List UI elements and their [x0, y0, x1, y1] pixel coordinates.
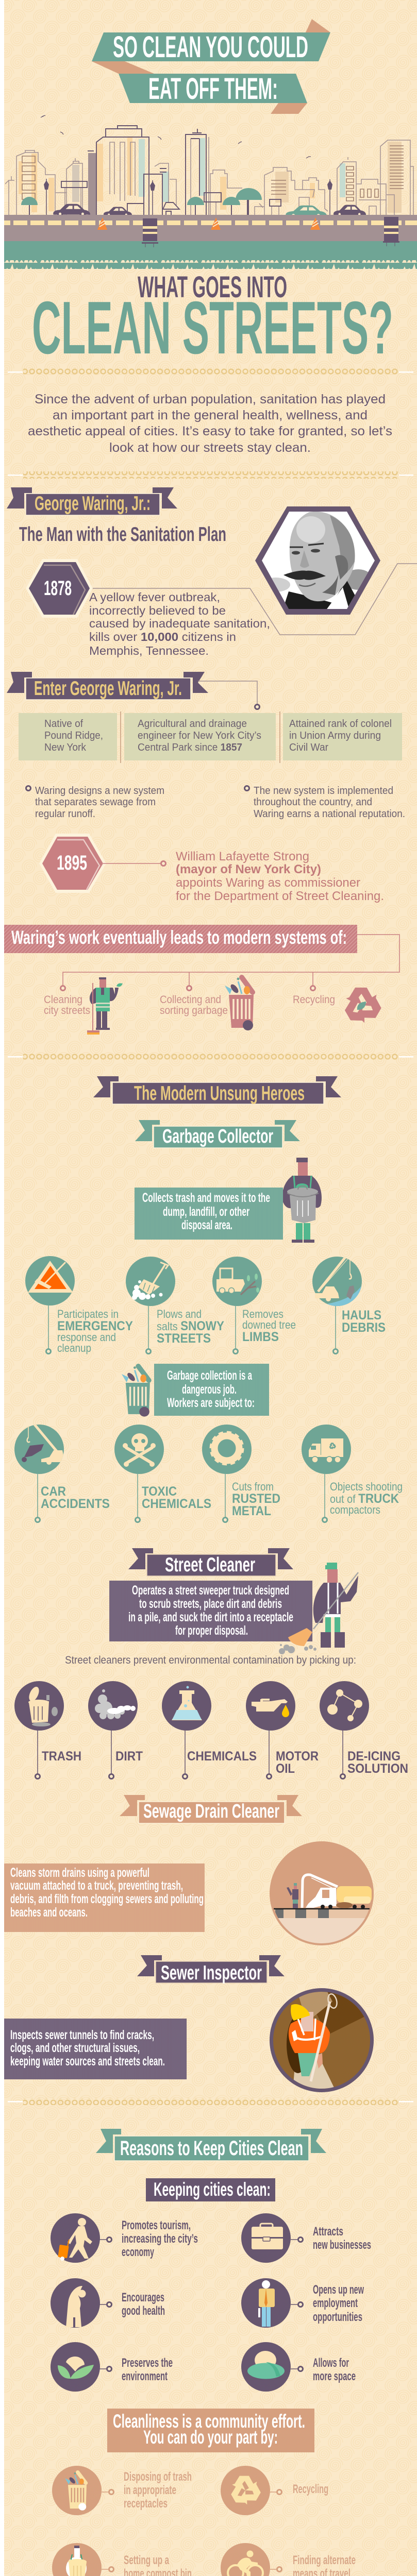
pickup: trash: TRASH: [42, 1749, 81, 1764]
duty: tree limbs: Removes: [242, 1308, 283, 1320]
year badge 1878: [26, 559, 93, 618]
text box: street cleaner role: Operates a street sweeper truck designed: [132, 1583, 289, 1598]
bullet points: [26, 785, 405, 820]
reason: employment: employment: [313, 2296, 358, 2310]
ribbon heading: Street Cleaner: [128, 1548, 293, 1576]
duty: snowy streets: STREETS: [157, 1331, 211, 1346]
hazard: toxic chemicals: TOXIC: [142, 1484, 177, 1499]
reason: new businesses: new businesses: [313, 2238, 371, 2252]
reason: employment: Opens up new: [313, 2283, 364, 2297]
reason: tourism: economy: [122, 2245, 154, 2259]
text box: garbage collector role: disposal area.: [181, 1218, 232, 1232]
duty: emergency response: Participates in: [57, 1308, 119, 1320]
hazard: toxic chemicals: [114, 1425, 211, 1522]
bar ladders: [22, 146, 404, 201]
city skyline illustration: [5, 115, 413, 218]
duty: emergency response: [25, 1256, 133, 1354]
1895 appointment text: William Lafayette Strong: [176, 850, 309, 863]
figure: garbage collector with can: [282, 1158, 322, 1243]
pickup: trash: [14, 1681, 81, 1778]
duty: tree limbs: LIMBS: [242, 1330, 279, 1344]
ribbon heading: George Waring, Jr.: [7, 487, 177, 515]
pickup: motor oil: OIL: [276, 1761, 295, 1776]
reason: good health: Encourages: [122, 2291, 164, 2304]
hazard: car accidents: [14, 1425, 110, 1522]
fact boxes: [19, 711, 402, 763]
action: home compost bin: Setting up a: [124, 2553, 169, 2567]
cars: [53, 204, 366, 218]
icon: teal bin: [122, 1366, 150, 1417]
bullet points: regular runoff.: [35, 808, 95, 820]
subheading box: keeping cities clean: [146, 2178, 275, 2201]
ribbon heading: Sewage Drain Cleaner: [120, 1795, 302, 1823]
hazard: rusted metal: Cuts from: [232, 1480, 274, 1493]
bullet points: The new system is implemented: [254, 785, 393, 796]
action: alternate travel: [221, 2543, 356, 2576]
action: disposing of trash: receptacles: [124, 2497, 168, 2511]
yellow fever text: kills over 10,000 citizens in: [89, 630, 236, 643]
1895 appointment text: [176, 850, 384, 903]
modern system labels: Collecting and: [160, 994, 221, 1006]
duty: hauls debris: HAULS: [342, 1308, 381, 1323]
thin building outlines: [5, 137, 413, 215]
text box: sewage drain cleaner role: beaches and oceans.: [10, 1905, 88, 1920]
reason: tourism: increasing the city’s: [122, 2232, 198, 2246]
text box: street cleaner role: for proper disposal.: [175, 1623, 248, 1638]
bullet points: that separates sewage from: [35, 796, 156, 808]
modern system labels: sorting garbage: [160, 1005, 228, 1016]
icon: recycling arrows: [340, 988, 385, 1026]
bullet points: throughout the country, and: [254, 796, 372, 808]
bullet points: Waring designs a new system: [35, 785, 164, 796]
yellow fever text: caused by inadequate sanitation,: [89, 617, 270, 630]
ribbon heading: Enter George Waring, Jr.: [7, 672, 208, 700]
ribbon heading: The Modern Unsung Heroes: [93, 1076, 341, 1105]
ribbon heading: Enter George Waring, Jr.: Enter George Waring, Jr.: [34, 677, 182, 700]
duty: snowy streets: Plows and: [157, 1308, 202, 1320]
icon: street worker with broom: [87, 977, 123, 1035]
ribbon heading: Reasons to Keep Cities Clean: Reasons to Keep Cities Clean: [120, 2137, 303, 2160]
bullet points: Waring earns a national reputation.: [254, 808, 405, 820]
ribbon heading: Sewer Inspector: [137, 1955, 285, 1984]
divider: [8, 2098, 413, 2105]
ribbon heading: Garbage Collector: Garbage Collector: [162, 1126, 273, 1147]
pickup: motor oil: [246, 1681, 319, 1778]
pickup: dirt: DIRT: [115, 1749, 143, 1764]
divider: [8, 471, 413, 479]
pickup: de-icing solution: DE-ICING: [347, 1749, 401, 1764]
banner: modern systems: [4, 925, 357, 953]
fact boxes: engineer for New York City’s: [138, 730, 261, 741]
pickup: motor oil: MOTOR: [276, 1749, 319, 1764]
reason: tourism: Promotes tourism,: [122, 2218, 191, 2232]
year badge 1878: 1878: [44, 577, 72, 600]
reason: new businesses: [241, 2213, 371, 2263]
ribbon heading: Garbage Collector: [135, 1120, 300, 1148]
modern system labels: city streets: [44, 1005, 90, 1016]
ribbon heading: Sewage Drain Cleaner: Sewage Drain Cleaner: [143, 1801, 279, 1822]
fact boxes: Attained rank of colonel: [289, 718, 392, 730]
action: home compost bin: [52, 2543, 192, 2576]
reason: environment: environment: [122, 2369, 168, 2383]
text box: sewage drain cleaner role: debris, and filth from clogging sewers and polluting: [10, 1892, 204, 1906]
text box: sewer inspector role: Inspects sewer tunnels to find cracks,: [10, 2028, 154, 2042]
traffic cones: [97, 217, 320, 230]
text box: garbage collector role: dump, landfill, or other: [163, 1205, 249, 1219]
text box: garbage collector role: Collects trash and moves it to the: [142, 1191, 270, 1205]
duty: hauls debris: DEBRIS: [342, 1320, 386, 1335]
yellow fever text: [89, 590, 270, 657]
action: alternate travel: Finding alternate: [293, 2553, 356, 2567]
fact boxes: Native of: [44, 718, 83, 730]
reason: environment: [51, 2342, 173, 2392]
timeline connector 1878: [90, 564, 417, 635]
hazard: rusted metal: METAL: [232, 1504, 271, 1518]
1895 appointment text: appoints Waring as commissioner: [176, 876, 360, 890]
fact boxes: Central Park since 1857: [138, 742, 242, 753]
text box: street cleaner role: [109, 1581, 312, 1641]
intro paragraph: [28, 392, 392, 455]
action: disposing of trash: in appropriate: [124, 2483, 176, 2497]
text box: street cleaner role: in a pile, and suck the dirt into a receptacle: [128, 1610, 293, 1624]
fact boxes: in Union Army during: [289, 730, 381, 741]
illustration: sewer inspector in tunnel: [270, 1988, 374, 2093]
connector to fact boxes: [198, 681, 260, 709]
connector tree to modern systems: [61, 935, 399, 990]
duty: tree limbs: downed tree: [242, 1318, 296, 1331]
reason: tourism: [51, 2213, 198, 2263]
reason: new businesses: Attracts: [313, 2225, 343, 2239]
text box: dangerous job: dangerous job.: [182, 1382, 237, 1397]
ribbon heading: George Waring, Jr.: George Waring, Jr.:: [35, 493, 151, 515]
subheading: The Man with the Sanitation Plan: [19, 523, 226, 546]
text box: street cleaner role: to scrub streets, place dirt and debris: [139, 1597, 282, 1611]
street trees: [21, 188, 262, 215]
pickup: chemicals: [162, 1681, 257, 1778]
year badge 1895: 1895: [57, 852, 87, 874]
action: recycling: Recycling: [293, 2482, 328, 2496]
pickup: chemicals: CHEMICALS: [187, 1749, 257, 1764]
text box: sewage drain cleaner role: [4, 1863, 205, 1932]
intro paragraph: aesthetic appeal of cities. It’s easy to take for granted, so let’s: [28, 424, 392, 438]
year badge 1895: [39, 834, 166, 893]
hazard: truck compactors: compactors: [330, 1503, 380, 1516]
action: recycling: [221, 2466, 328, 2515]
text box: garbage collector role: [135, 1188, 283, 1240]
pickup: de-icing solution: [320, 1681, 408, 1778]
fact boxes: Pound Ridge,: [44, 730, 103, 741]
duty: hauls debris: [312, 1257, 386, 1354]
yellow fever text: Memphis, Tennessee.: [89, 644, 209, 657]
intro paragraph: Since the advent of urban population, sanitation has played: [35, 392, 386, 406]
pickup: dirt: [88, 1681, 143, 1778]
modern system labels: Cleaning: [44, 994, 82, 1006]
bollards: [143, 217, 398, 243]
hazard: car accidents: ACCIDENTS: [41, 1497, 110, 1511]
street lamps: [44, 179, 332, 215]
ribbon heading: Sewer Inspector: Sewer Inspector: [161, 1962, 262, 1984]
action: disposing of trash: Disposing of trash: [124, 2470, 192, 2484]
modern system labels: Recycling: [293, 994, 335, 1006]
duty: emergency response: cleanup: [57, 1342, 91, 1354]
reason: good health: good health: [122, 2304, 165, 2318]
figure: street cleaner with broom: [279, 1563, 358, 1654]
ribbon heading: The Modern Unsung Heroes: The Modern Unsung Heroes: [134, 1082, 305, 1105]
reason: more space: [241, 2342, 356, 2392]
hazard: rusted metal: [202, 1425, 280, 1522]
hazard: rusted metal: RUSTED: [232, 1492, 280, 1506]
grass strip: [4, 241, 417, 269]
illustration: drain vacuum truck: [270, 1841, 374, 1949]
text box: sewage drain cleaner role: Cleans storm drains using a powerful: [10, 1866, 149, 1880]
birds: [41, 115, 311, 158]
reason: employment: opportunities: [313, 2310, 362, 2324]
road with lane markings, cones and bollards: [4, 215, 417, 243]
drain worker: [287, 1883, 298, 1908]
duty: snowy streets: [126, 1257, 224, 1354]
title: WHAT GOES INTO: [138, 270, 287, 304]
ribbon heading: Street Cleaner: Street Cleaner: [165, 1554, 255, 1576]
text box: dangerous job: Workers are subject to:: [167, 1396, 255, 1410]
duty: emergency response: response and: [57, 1331, 116, 1344]
1895 appointment text: for the Department of Street Cleaning.: [176, 889, 384, 903]
pickup: de-icing solution: SOLUTION: [347, 1761, 408, 1776]
subheading box: keeping cities clean: Keeping cities clean:: [154, 2179, 271, 2200]
icon: garbage bin: [225, 977, 254, 1030]
divider: [8, 368, 413, 376]
reason: more space: more space: [313, 2369, 356, 2383]
duty: snowy streets: salts SNOWY: [157, 1319, 224, 1333]
fact boxes: Agricultural and drainage: [138, 718, 247, 730]
reason: employment: [241, 2278, 364, 2328]
text box: sewer inspector role: keeping water sources and streets clean.: [10, 2054, 165, 2069]
statement: street cleaners prevent contamination: Street cleaners prevent environmental contamination by picking up:: [65, 1654, 356, 1666]
callout: community effort: You can do your part by:: [143, 2427, 278, 2448]
bold building outlines: [61, 126, 281, 215]
reason: environment: Preserves the: [122, 2356, 173, 2370]
tinted building strips: [19, 138, 315, 212]
callout: community effort: Cleanliness is a community effort.: [113, 2411, 305, 2432]
fact boxes: Civil War: [289, 742, 328, 753]
1895 appointment text: (mayor of New York City): [176, 862, 321, 876]
hazard: truck compactors: Objects shooting: [330, 1480, 403, 1493]
intro paragraph: an important part in the general health, wellness, and: [53, 408, 368, 422]
duty: tree limbs: [212, 1257, 296, 1354]
intro paragraph: look at how our streets stay clean.: [109, 440, 311, 455]
fact boxes: New York: [44, 742, 87, 753]
divider: [8, 1053, 413, 1060]
text box: dangerous job: Garbage collection is a: [167, 1368, 253, 1383]
text box: sewer inspector role: clogs, and other structural issues,: [10, 2041, 140, 2055]
hazard: truck compactors: [302, 1425, 403, 1522]
modern system labels: [44, 994, 335, 1016]
ribbon heading: Reasons to Keep Cities Clean: [96, 2129, 326, 2161]
duty: emergency response: EMERGENCY: [57, 1319, 133, 1333]
header ribbon: [92, 19, 330, 114]
reason: good health: [51, 2278, 165, 2328]
text box: sewage drain cleaner role: vacuum attached to a truck, preventing trash,: [10, 1878, 183, 1893]
header ribbon: EAT OFF THEM:: [148, 72, 278, 106]
action: disposing of trash: [52, 2466, 192, 2515]
portrait of George Waring: [255, 506, 380, 615]
hazard: toxic chemicals: CHEMICALS: [142, 1497, 211, 1511]
text box: dangerous job: [154, 1364, 269, 1416]
yellow fever text: A yellow fever outbreak,: [89, 590, 220, 604]
text box: sewer inspector role: [4, 2019, 187, 2079]
hazard: car accidents: CAR: [41, 1484, 66, 1499]
yellow fever text: incorrectly believed to be: [89, 604, 226, 617]
hazard: truck compactors: out of TRUCK: [330, 1492, 399, 1506]
callout: community effort: [107, 2409, 314, 2452]
reason: more space: Allows for: [313, 2356, 349, 2370]
